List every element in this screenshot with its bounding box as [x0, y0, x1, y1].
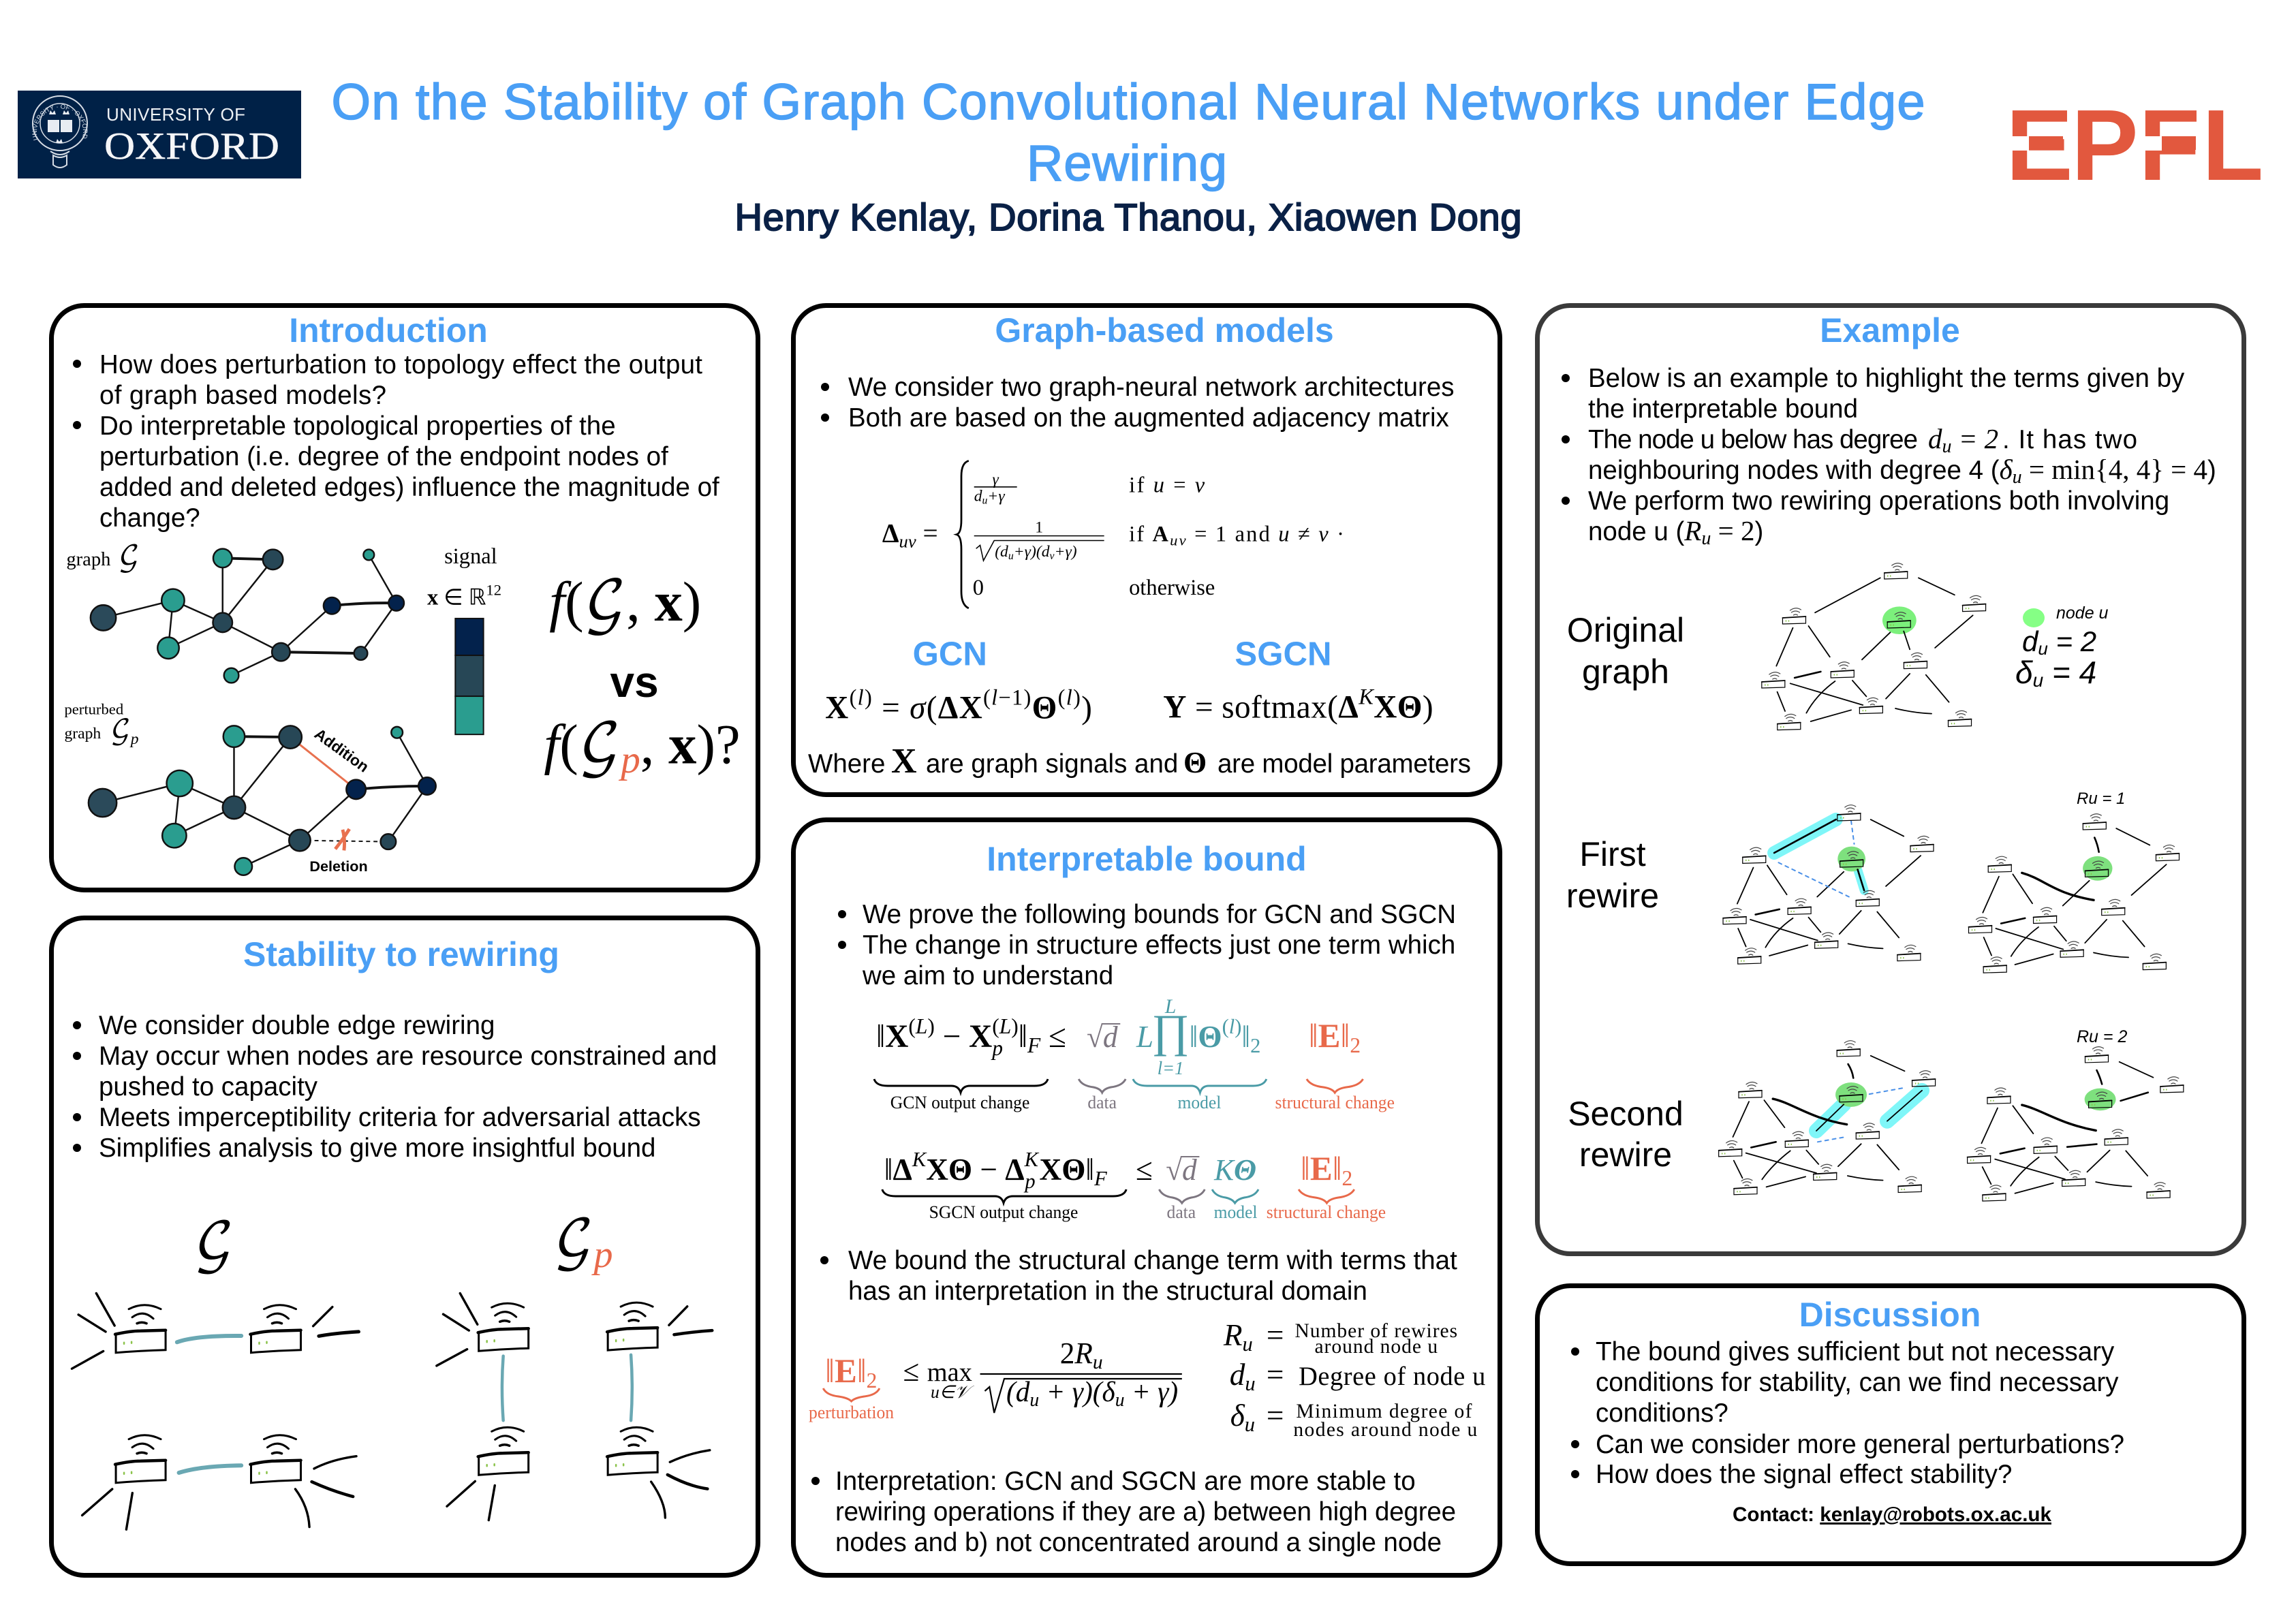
- label: G: 𝒢: [194, 1219, 234, 1275]
- formula: augmented adjacency matrix: Δ: [882, 518, 899, 548]
- label: first rewire: rewire: [1566, 877, 1659, 915]
- formula: augmented adjacency matrix: +γ: [987, 487, 1005, 505]
- formula: perturbation bound: +: [1039, 1377, 1072, 1408]
- text: stability bullets: May occur when nodes are resource constrained and: [99, 1042, 717, 1071]
- formula: f(Gp,x)?: f(𝒢: [544, 713, 621, 775]
- diagram: network Gp: [437, 1294, 712, 1520]
- label: original graph: graph: [1582, 653, 1669, 691]
- label: second rewire: [1568, 1095, 1684, 1174]
- braces: GCN bound: [874, 1079, 1363, 1093]
- text: intro bullets: change?: [99, 503, 200, 533]
- text: models bullets: [821, 373, 1454, 433]
- formula: augmented adjacency matrix: (d: [995, 543, 1008, 561]
- formula: perturbation bound: +: [1125, 1377, 1158, 1408]
- title: On the Stability of Graph Convolutional Neural Networks under Edge: [331, 74, 1925, 130]
- formula: perturbation bound: ≤: [903, 1355, 919, 1388]
- labels: GCN bound: model: [1177, 1093, 1221, 1112]
- formula: augmented adjacency matrix: u: [982, 495, 988, 506]
- formula: GCN bound: (l): [1222, 1015, 1241, 1038]
- text: models bullets: We consider two graph-neural network architectures: [848, 373, 1454, 402]
- text: stability bullets: [73, 1011, 717, 1163]
- formula: GCN bound: X: [969, 1019, 992, 1055]
- diagram: second rewire before: [1719, 1041, 1936, 1195]
- formula: augmented adjacency matrix: 0: [973, 576, 984, 600]
- legend: bound terms: u: [1245, 1413, 1255, 1436]
- legend: bound terms: Degree of node u: [1299, 1362, 1486, 1391]
- chart: perturbed graph: [89, 725, 436, 875]
- formula: perturbation bound: [809, 1337, 1182, 1422]
- formula: GCN: ): [1081, 690, 1093, 725]
- legend: node u: δ: [2015, 655, 2033, 690]
- formula: augmented adjacency matrix: = 1 and: [1188, 522, 1278, 546]
- figure: graphs and signal: [64, 543, 741, 875]
- legend: bound terms: u: [1245, 1372, 1256, 1395]
- text: stability bullets: Simplifies analysis to give more insightful bound: [99, 1134, 655, 1163]
- text: discussion bullets: The bound gives sufficient but not necessary: [1596, 1337, 2115, 1367]
- formula: GCN: =: [873, 690, 910, 725]
- text: intro bullets: of graph based models?: [99, 381, 386, 410]
- text: example bullets: u: [2013, 467, 2022, 488]
- text: intro bullets: Do interpretable topological properties of the: [99, 411, 616, 441]
- formula: f(Gp,x)?: ,: [640, 713, 668, 775]
- text: example bullets: u: [1942, 436, 1951, 457]
- text: discussion bullets: [1571, 1337, 2124, 1489]
- text: discussion bullets: Can we consider more general perturbations?: [1596, 1430, 2124, 1459]
- formula: augmented adjacency matrix: γ: [993, 471, 999, 488]
- label: Gp: p: [591, 1234, 612, 1276]
- label: second rewire: Second: [1568, 1095, 1684, 1133]
- text: interpretation: nodes and b) not concentrated around a single node: [835, 1528, 1442, 1557]
- title: Rewiring: [1027, 135, 1227, 191]
- text: vs: vs: [610, 657, 659, 706]
- formula: GCN bound: ‖X: [876, 1019, 908, 1055]
- text: discussion bullets: How does the signal effect stability?: [1596, 1460, 2012, 1489]
- diagram: second rewire after: [1968, 1047, 2184, 1201]
- heading: GCN: GCN: [913, 636, 987, 673]
- chart: signal vector: [455, 619, 484, 734]
- diagram: first rewire after: [1969, 814, 2179, 973]
- text: intro bullets: added and deleted edges) influence the magnitude of: [99, 473, 719, 502]
- label: deletion: Deletion: [309, 858, 368, 875]
- label: x in R12: x ∈ ℝ: [427, 585, 486, 610]
- formula: GCN bound: (L): [908, 1014, 935, 1038]
- formula: perturbation bound: 2R: [1060, 1337, 1093, 1370]
- heading: graph-based models: Graph-based models: [995, 311, 1334, 349]
- text: structural bound bullet: has an interpretation in the structural domain: [848, 1277, 1367, 1306]
- formula: GCN bound: F: [1027, 1033, 1041, 1057]
- formula: perturbation bound: (d: [1006, 1377, 1029, 1408]
- formula: GCN bound: l=1: [1158, 1058, 1183, 1078]
- heading: stability: Stability to rewiring: [243, 935, 559, 973]
- label: perturbed graph: [64, 701, 139, 748]
- formula: GCN bound: 2: [1250, 1034, 1260, 1057]
- legend: node u: u: [2033, 670, 2044, 691]
- formula: SGCN: XΘ: [1374, 689, 1423, 725]
- formula: perturbation bound: 2: [867, 1369, 877, 1392]
- formula: GCN bound: √d: [1087, 1021, 1118, 1054]
- logo: University of Oxford: UNIVERSITY · OF · OXFORD: [32, 104, 87, 140]
- formula: GCN: (l): [1058, 686, 1081, 710]
- label: Ru = 2: Ru = 2: [2077, 1027, 2127, 1046]
- formula: SGCN: K: [1358, 685, 1375, 710]
- legend: bound terms: δ: [1230, 1398, 1245, 1433]
- diagram: network G: [72, 1294, 358, 1529]
- formula: perturbation bound: γ): [1158, 1377, 1178, 1408]
- label: x in R12: 12: [486, 581, 501, 598]
- formula: f(Gp,x)?: p: [618, 738, 640, 781]
- logo: University of Oxford: OXFORD: [104, 125, 279, 168]
- text: bound bullets: The change in structure effects just one term which: [863, 931, 1455, 960]
- text: example bullets: node u (R: [1588, 515, 1701, 546]
- formula: GCN bound: L: [1164, 995, 1176, 1018]
- text: example bullets: Below is an example to highlight the terms given by: [1588, 364, 2185, 393]
- heading: SGCN: SGCN: [1235, 636, 1332, 673]
- labels: SGCN bound: data: [1167, 1202, 1196, 1222]
- formula: GCN: X: [825, 690, 850, 725]
- formula: GCN bound: L: [1136, 1019, 1153, 1054]
- formula: GCN: σ(ΔX: [910, 690, 983, 725]
- formula: SGCN bound: [884, 1148, 1352, 1193]
- formula: perturbation bound: perturbation: [809, 1403, 894, 1422]
- formula: SGCN bound: ‖: [1085, 1152, 1094, 1187]
- heading: introduction: Introduction: [289, 311, 488, 349]
- formulas: bounds: [809, 995, 1486, 1441]
- formula: f(G,x): f(𝒢, x): [549, 570, 701, 636]
- chart: original graph: [91, 549, 404, 683]
- formula: GCN bound: ‖: [1019, 1019, 1027, 1055]
- labels: SGCN bound: model: [1214, 1202, 1258, 1222]
- formula: f(Gp,x)?: x)?: [668, 713, 741, 775]
- formula: perturbation bound: u∈𝒱: [931, 1382, 975, 1402]
- formula: SGCN bound: XΘ: [926, 1152, 972, 1187]
- text: where X are graph signals: are model parameters: [1217, 749, 1471, 779]
- legend: node u: = 4: [2043, 655, 2096, 690]
- text: interpretation: rewiring operations if they are a) between high degree: [835, 1497, 1456, 1527]
- legend: bound terms: around node u: [1314, 1335, 1438, 1358]
- heading: example: Example: [1820, 311, 1960, 349]
- text: stability bullets: pushed to capacity: [99, 1072, 318, 1102]
- text: intro bullets: perturbation (i.e. degree of the endpoint nodes of: [99, 442, 668, 471]
- text: example bullets: neighbouring nodes with degree 4 (δ: [1588, 454, 2013, 485]
- logo: University of Oxford: UNIVERSITY OF: [106, 104, 245, 125]
- formula: GCN bound: (L): [992, 1014, 1019, 1038]
- formula: augmented adjacency matrix: +γ)(d: [1014, 543, 1050, 561]
- labels: GCN bound: data: [1087, 1093, 1117, 1112]
- diagram: first rewire before: [1723, 805, 1934, 964]
- text: example bullets: We perform two rewiring operations both involving: [1588, 486, 2169, 516]
- text: where X are graph signals: are graph signals and: [926, 749, 1178, 779]
- formula: augmented adjacency matrix: 1: [1035, 519, 1043, 537]
- formula: perturbation bound: max: [927, 1358, 972, 1387]
- formula: augmented adjacency matrix: +γ): [1055, 543, 1077, 561]
- formula: augmented adjacency matrix: =: [916, 518, 938, 548]
- text: where X are graph signals: X: [891, 742, 917, 781]
- panel: example: [1537, 305, 2244, 1253]
- label: first rewire: First: [1579, 835, 1646, 873]
- formula: augmented adjacency matrix: if u = v: [1129, 473, 1207, 498]
- formula: GCN: (l): [850, 686, 873, 710]
- label: Gp: 𝒢: [554, 1216, 593, 1269]
- diagram: original graph: [1762, 563, 1986, 730]
- label: Ru = 1: Ru = 1: [2077, 790, 2125, 808]
- text: example bullets: ): [2207, 456, 2216, 485]
- text: example bullets: d: [1928, 423, 1942, 454]
- formula: augmented adjacency matrix: v: [1050, 550, 1055, 562]
- formula: GCN bound: p: [991, 1036, 1003, 1060]
- formula: GCN: (l−1): [983, 686, 1032, 710]
- legend: bound terms: =: [1267, 1317, 1284, 1352]
- formula: SGCN bound: p: [1023, 1170, 1036, 1193]
- label: addition: Addition: [311, 725, 372, 776]
- label: perturbed graph: perturbed: [64, 701, 124, 718]
- legend: bound terms: =: [1267, 1357, 1284, 1392]
- panel: stability to rewiring: [52, 918, 758, 1575]
- text: structural bound bullet: We bound the structural change term with terms that: [848, 1246, 1457, 1275]
- text: example bullets: = 2: [1711, 515, 1754, 546]
- formula: augmented adjacency matrix: uv: [1170, 531, 1188, 548]
- formula: augmented adjacency matrix: [882, 460, 1346, 608]
- labels: SGCN bound: structural change: [1267, 1202, 1386, 1222]
- legend: node u: node u: [2056, 604, 2109, 623]
- label: original graph: Original: [1567, 611, 1684, 649]
- text: contact: Contact: kenlay@robots.ox.ac.uk: [1733, 1503, 2052, 1526]
- text: bound bullets: [838, 900, 1456, 990]
- formula: SGCN bound: XΘ: [1040, 1152, 1085, 1187]
- legend: bound terms: Number of rewires: [1294, 1320, 1458, 1342]
- formulas: adjacency, GCN and SGCN: [825, 460, 1433, 725]
- label: first rewire: [1566, 835, 1659, 915]
- text: example bullets: ): [1754, 517, 1763, 546]
- text: bound bullets: we aim to understand: [862, 961, 1113, 990]
- formula: SGCN: Y = softmax(Δ: [1163, 689, 1359, 725]
- label: second rewire: rewire: [1579, 1136, 1672, 1174]
- labels: SGCN bound: [929, 1202, 1386, 1222]
- text: example bullets: u: [1701, 528, 1711, 549]
- text: example bullets: = min{4, 4} = 4: [2022, 454, 2207, 485]
- formula: perturbation bound: u: [1029, 1390, 1039, 1411]
- text: example bullets: = 2: [1951, 423, 1998, 454]
- legend: bound terms: nodes around node u: [1293, 1418, 1478, 1441]
- heading: discussion: Discussion: [1799, 1296, 1981, 1334]
- formula: perturbation bound: u: [1115, 1390, 1125, 1411]
- formula: augmented adjacency matrix: uv: [899, 531, 916, 551]
- panel: graph-based models: [793, 305, 1500, 794]
- braces: SGCN bound: [882, 1189, 1354, 1203]
- formula: GCN bound: ∏: [1152, 1005, 1190, 1057]
- text: stability bullets: We consider double edge rewiring: [99, 1011, 495, 1040]
- text: example bullets: the interpretable bound: [1588, 394, 1858, 424]
- panel: introduction: [52, 305, 758, 890]
- authors: Henry Kenlay, Dorina Thanou, Xiaowen Dong: [734, 196, 1522, 238]
- formula: SGCN bound: − Δ: [980, 1152, 1025, 1187]
- label: graph G: graph 𝒢: [66, 543, 140, 573]
- text: intro bullets: [73, 350, 719, 533]
- text: models bullets: Both are based on the augmented adjacency matrix: [848, 403, 1449, 433]
- formula: SGCN bound: K: [912, 1148, 927, 1171]
- formula: GCN bound: −: [935, 1019, 969, 1055]
- legend: node u: u: [2038, 638, 2048, 659]
- heading: interpretable bound: Interpretable bound: [987, 840, 1307, 878]
- text: bound bullets: We prove the following bounds for GCN and SGCN: [863, 900, 1456, 929]
- legend: node u: d: [2022, 625, 2038, 657]
- formula: SGCN bound: KΘ: [1213, 1154, 1256, 1187]
- legend: node u: [2015, 604, 2109, 691]
- label: original graph: [1567, 611, 1684, 691]
- text: example bullets: The node u below has degree: [1588, 425, 1918, 454]
- title: [331, 74, 1925, 191]
- legend: bound terms: d: [1230, 1357, 1245, 1392]
- formula: augmented adjacency matrix: d: [974, 487, 982, 505]
- formula: GCN bound: ‖: [1241, 1019, 1250, 1054]
- logo: EPFL: EPFL: [2006, 89, 2263, 202]
- formula: augmented adjacency matrix: if A: [1129, 522, 1170, 546]
- formula: perturbation bound: γ)(δ: [1072, 1377, 1115, 1408]
- formula: augmented adjacency matrix: u: [1008, 550, 1014, 562]
- formula: SGCN bound: ‖E‖: [1301, 1150, 1342, 1187]
- legend: bound terms: [1223, 1317, 1486, 1441]
- panel: discussion: [1537, 1286, 2244, 1564]
- formula: perturbation bound: ‖E‖: [825, 1352, 867, 1390]
- formula: SGCN bound: 2: [1342, 1166, 1352, 1190]
- formula: augmented adjacency matrix: u ≠ v ·: [1278, 522, 1346, 546]
- formula: augmented adjacency matrix: otherwise: [1129, 576, 1215, 600]
- formula: SGCN: ): [1423, 689, 1433, 725]
- text: where X are graph signals: [808, 742, 1471, 781]
- text: example bullets: . It has two: [2002, 425, 2137, 454]
- formula: GCN bound: [876, 995, 1361, 1078]
- text: example bullets: [1562, 364, 2216, 549]
- formula: SGCN bound: F: [1093, 1167, 1108, 1190]
- formula: GCN bound: 2: [1350, 1033, 1361, 1057]
- label: perturbed graph: p: [129, 730, 139, 748]
- panel: interpretable bound: [793, 820, 1500, 1575]
- formula: SGCN bound: ‖Δ: [884, 1152, 912, 1187]
- labels: GCN bound: GCN output change: [890, 1093, 1029, 1112]
- formula: SGCN bound: √d: [1166, 1154, 1197, 1187]
- legend: bound terms: =: [1267, 1398, 1284, 1433]
- text: structural bound bullet: [820, 1246, 1457, 1306]
- formula: perturbation bound: u: [1093, 1351, 1103, 1373]
- text: discussion bullets: conditions for stability, can we find necessary: [1596, 1368, 2119, 1397]
- formula: SGCN bound: ≤: [1136, 1152, 1153, 1187]
- label: signal: signal: [444, 544, 497, 569]
- labels: GCN bound: structural change: [1275, 1093, 1395, 1112]
- text: discussion bullets: conditions?: [1596, 1399, 1728, 1428]
- formula: GCN bound: ≤: [1040, 1019, 1066, 1055]
- label: perturbed graph: graph 𝒢: [64, 718, 131, 745]
- text: stability bullets: Meets imperceptibility criteria for adversarial attacks: [99, 1103, 701, 1132]
- text: interpretation: Interpretation: GCN and SGCN are more stable to: [835, 1467, 1416, 1496]
- formula: SGCN bound: K: [1024, 1148, 1040, 1171]
- legend: bound terms: u: [1243, 1332, 1253, 1356]
- labels: SGCN bound: SGCN output change: [929, 1202, 1078, 1222]
- text: where X are graph signals: Θ: [1183, 746, 1207, 779]
- legend: bound terms: R: [1224, 1317, 1243, 1352]
- logo: University of Oxford: [18, 91, 301, 178]
- legend: bound terms: Minimum degree of: [1296, 1400, 1473, 1422]
- text: where X are graph signals: Where: [808, 749, 885, 779]
- legend: node u: = 2: [2048, 625, 2096, 657]
- text: interpretation: [811, 1467, 1456, 1557]
- text: intro bullets: How does perturbation to topology effect the output: [99, 350, 702, 379]
- formula: GCN: Θ: [1032, 690, 1058, 725]
- labels: GCN bound: [890, 1093, 1395, 1112]
- formula: GCN bound: ‖Θ: [1190, 1019, 1222, 1054]
- formula: GCN bound: ‖E‖: [1309, 1017, 1350, 1055]
